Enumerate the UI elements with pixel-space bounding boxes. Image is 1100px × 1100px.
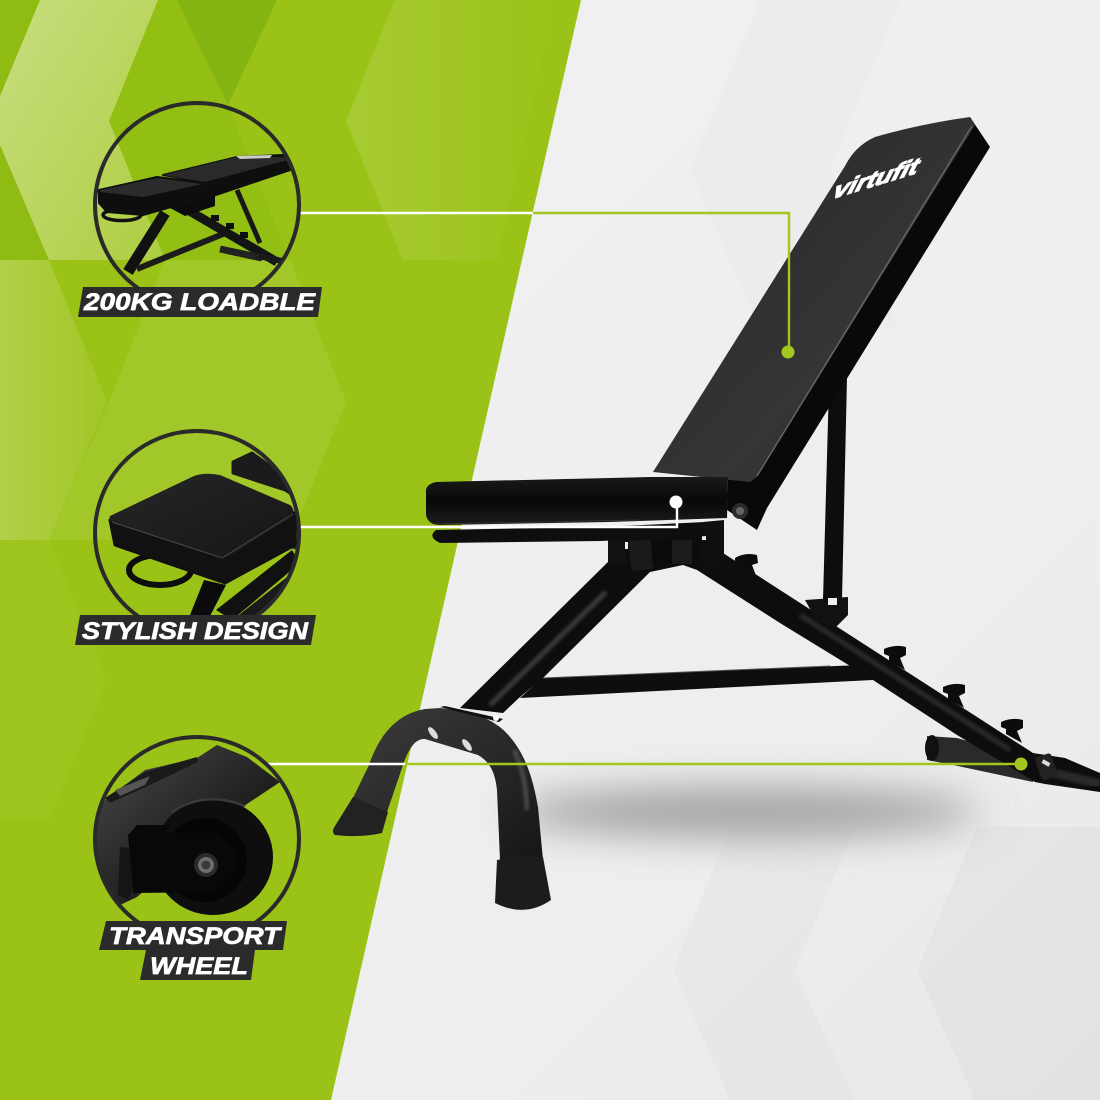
seat mechanism brackets (608, 520, 724, 571)
label: TRANSPORT WHEEL: WHEEL (150, 953, 248, 980)
background: green angled panel with hexagon facets (0, 0, 581, 1100)
label: TRANSPORT WHEEL: TRANSPORT (109, 923, 283, 950)
feature 3: transport wheel detail (95, 737, 299, 980)
A-frame tubes (460, 530, 1100, 792)
circle frame (95, 737, 299, 941)
callout line: seat (300, 496, 682, 527)
label: TRANSPORT WHEEL (99, 921, 287, 980)
floor shadow (510, 788, 980, 836)
callout line: backrest (300, 213, 794, 358)
circle frame (95, 103, 299, 307)
callout line: wheel (268, 758, 1028, 770)
product: adjustable weight bench (333, 117, 1100, 910)
feature 2: seat pad detail (75, 431, 316, 645)
label: 200KG LOADBLE: 200KG LOADBLE (83, 289, 316, 316)
detail image: seat close-up (110, 453, 300, 622)
pivot bolt (732, 503, 748, 519)
feature 1: bench in flat position (78, 103, 322, 317)
backrest pad side (727, 117, 990, 530)
crossbar (520, 664, 892, 698)
seat underside handle plate (432, 522, 708, 543)
seat pad (426, 477, 728, 525)
transport tube with wheel (925, 735, 1035, 782)
backrest pad top surface (653, 117, 975, 482)
virtufit logo: virtufit (830, 152, 924, 204)
detail image: wheel close-up (95, 745, 280, 915)
circle frame (95, 431, 299, 635)
detail image: flat bench (99, 155, 292, 272)
upright backrest support (823, 377, 847, 600)
label: STYLISH DESIGN: STYLISH DESIGN (82, 618, 309, 645)
base tube and feet (333, 706, 551, 910)
adjustment knobs (735, 554, 1059, 781)
